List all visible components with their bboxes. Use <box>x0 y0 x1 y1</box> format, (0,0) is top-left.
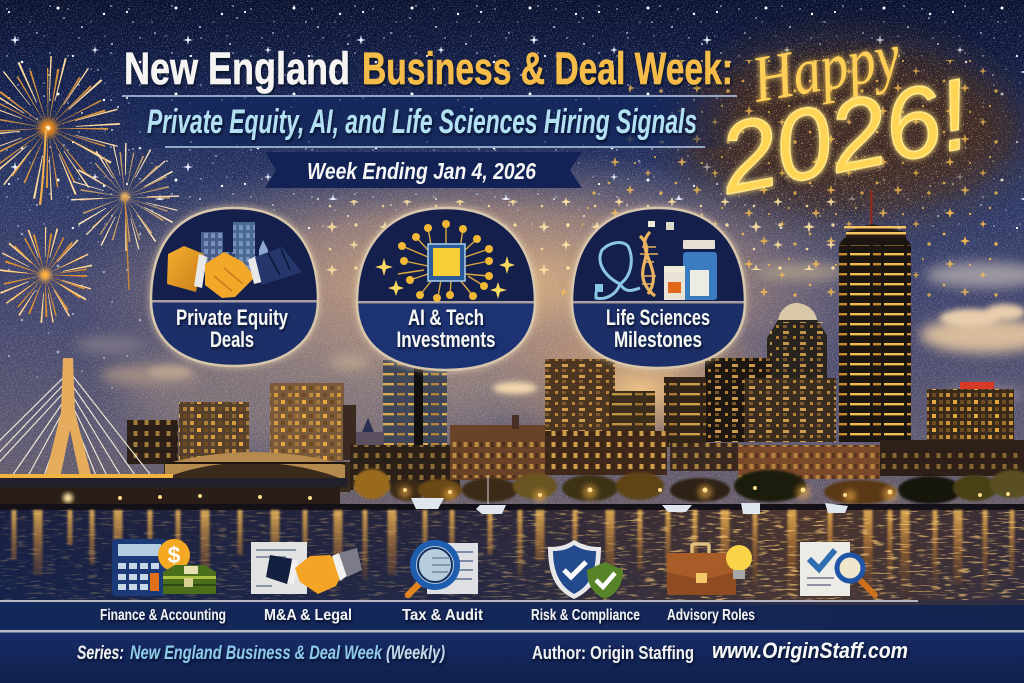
badge: private equity deals <box>151 208 318 368</box>
footer author: Author: Origin Staffing <box>532 643 694 663</box>
icon: calculator with coin and cash <box>112 539 216 596</box>
skyline <box>0 190 1024 510</box>
career bar background <box>0 600 1024 632</box>
main title <box>124 43 733 94</box>
icon: circuit chip <box>375 220 515 302</box>
career category labels: Tax & Audit <box>402 607 484 624</box>
building with red sign <box>927 382 1014 447</box>
badge label: Private Equity <box>176 305 289 330</box>
icon: M&A documents with handshake <box>251 542 362 594</box>
fireworks: three bursts on the left <box>0 78 163 308</box>
footer series text: Series: <box>77 643 124 664</box>
icon: handshake <box>167 246 302 298</box>
footer series text: (Weekly) <box>386 643 445 664</box>
Happy 2026 greeting: Happy <box>746 19 906 117</box>
badge: life sciences milestones <box>572 208 745 370</box>
night sky background <box>0 0 1024 515</box>
icon: calculator with coin and cash: $ <box>168 542 181 568</box>
left buildings <box>127 383 384 464</box>
firework burst 3 <box>12 242 78 308</box>
badge label: Life Sciences <box>606 305 710 330</box>
glass tower <box>383 360 447 450</box>
date text: Week Ending Jan 4, 2026 <box>307 158 536 184</box>
icon: stethoscope <box>595 243 640 298</box>
career category labels: Advisory Roles <box>667 607 755 624</box>
footer bar <box>0 630 1024 683</box>
gold sparkle field around Happy 2026 <box>320 15 1024 300</box>
career category labels: Finance & Accounting <box>100 607 226 624</box>
footer website: www.OriginStaff.com <box>712 638 908 663</box>
career category labels: Risk & Compliance <box>531 607 640 624</box>
moored boats <box>411 476 848 514</box>
icon: medicine bottles <box>648 221 717 300</box>
badge label: AI & Tech <box>408 305 484 330</box>
badge: AI and tech investments <box>357 208 535 372</box>
title band panel <box>110 96 750 148</box>
icon: tax document with magnifier <box>408 543 478 595</box>
firework burst 2 <box>87 159 163 290</box>
icon: city towers <box>201 222 268 272</box>
domed tower <box>767 303 827 385</box>
subtitle: Private Equity, AI, and Life Sciences Hiring Signals <box>147 103 697 141</box>
firework burst 1 <box>0 78 98 205</box>
career category labels <box>100 607 755 624</box>
main title: New England <box>124 43 350 94</box>
badge label: Milestones <box>614 327 702 352</box>
arched road bridge <box>164 452 350 492</box>
title rules <box>122 95 737 148</box>
footer series text: New England Business & Deal Week <box>130 643 383 664</box>
date ribbon <box>265 152 582 188</box>
badge label: Deals <box>210 327 254 352</box>
icon: briefcase with light bulb <box>667 544 752 595</box>
icon: checked document with magnifier <box>800 542 875 596</box>
waterfront trees and lamps <box>0 469 1024 510</box>
Happy 2026 greeting: 2026! <box>710 58 978 216</box>
river with light reflections <box>0 510 1024 632</box>
clouds <box>75 262 1024 403</box>
icon: DNA helix <box>640 232 658 296</box>
icon: risk shields with check marks <box>548 540 623 599</box>
badge label: Investments <box>396 327 496 352</box>
mid-rise cluster <box>545 358 836 447</box>
Zakim cable-stayed bridge <box>0 358 348 506</box>
Prudential tower <box>839 190 911 442</box>
waterfront low-rise buildings <box>350 415 1024 490</box>
main title: Business & Deal Week: <box>362 43 733 94</box>
career category labels: M&A & Legal <box>264 607 352 624</box>
